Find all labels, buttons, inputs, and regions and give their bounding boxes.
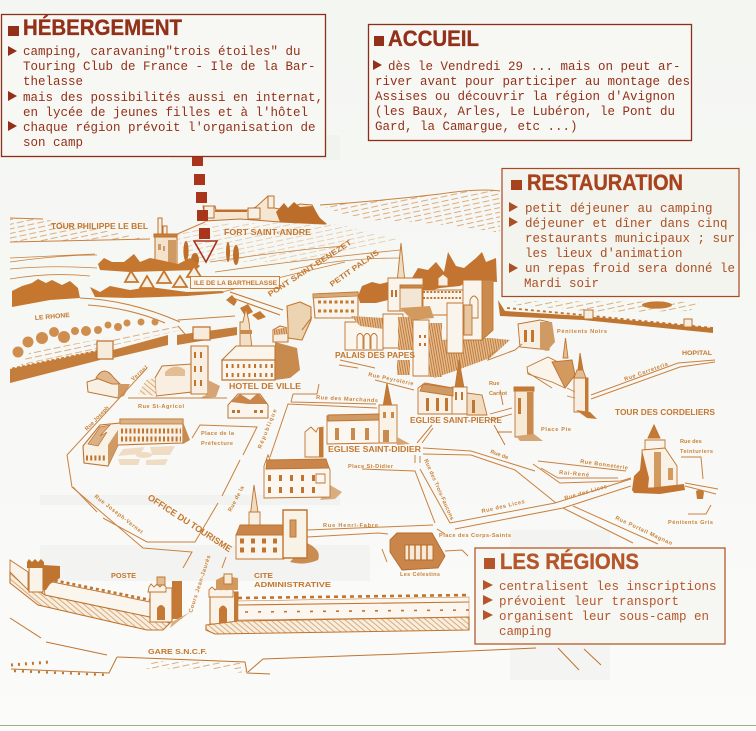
street labels: Rue (489, 381, 500, 387)
street labels: Pénitents Noirs (557, 329, 607, 335)
bullet text: restauration: Mardi soir (524, 277, 599, 291)
bullet text: les régions: camping (499, 625, 552, 639)
street labels: Place de la (201, 431, 235, 437)
bullet text: hébergement (8, 45, 323, 150)
street labels: Rue Bonneterie (580, 459, 628, 472)
street labels: Rue de (489, 449, 509, 461)
place labels: PETIT PALAIS (328, 248, 381, 289)
street labels: Place des Corps-Saints (439, 533, 511, 539)
Hôtel de Ville (222, 308, 300, 380)
street labels: Rue Portail Magnan (614, 515, 673, 547)
bullet text: les régions: prévoient leur transport (499, 595, 679, 609)
campsite tents (125, 266, 201, 288)
panel: hébergement (2, 14, 326, 156)
street labels: Rue des Trois-Faucons (422, 458, 454, 521)
place labels: EGLISE SAINT-PIERRE (410, 416, 503, 425)
church, Place Saint-Didier (264, 455, 342, 500)
street labels: Carnot (489, 391, 507, 397)
bullet text: hébergement: thelasse (23, 75, 83, 89)
street labels: Préfecture (201, 441, 233, 447)
place labels: LE RHONE (35, 312, 71, 322)
bullet text: restauration (509, 202, 735, 291)
Pénitents Noirs chapel (518, 320, 555, 351)
street labels: Rue Henri-Fabre (323, 523, 378, 529)
bullet text: hébergement: son camp (23, 136, 83, 150)
bullet text: restauration: petit déjeuner au camping (525, 202, 713, 216)
Eglise Saint-Pierre (418, 360, 487, 415)
bullet text: hébergement: camping, caravaning"trois étoiles" du (23, 45, 301, 59)
tower, rue Carnot (490, 387, 543, 445)
heading: les régions: LES RÉGIONS (500, 549, 639, 574)
bullet text: les régions: organisent leur sous-camp en (499, 610, 709, 624)
heading: accueil: ACCUEIL (388, 26, 479, 51)
panel: accueil (368, 24, 692, 140)
bullet text: hébergement: en lycée de jeunes filles et à l'hôtel (23, 106, 308, 120)
street labels: Les Célestins (400, 572, 440, 578)
bullet text: restauration: restaurants municipaux ; sur (525, 232, 735, 246)
Eglise Saint-Didier (305, 383, 410, 457)
street network (67, 344, 718, 568)
bullet text: les régions (483, 580, 717, 639)
Préfecture garden (118, 446, 175, 465)
street labels: République (257, 409, 279, 450)
place labels: PONT SAINT-BENEZET (266, 238, 354, 299)
gate tower right (209, 574, 238, 624)
cypress trees (183, 241, 239, 267)
tour Philippe le Bel (154, 218, 177, 265)
island vegetation (12, 254, 224, 307)
domed building (87, 371, 130, 398)
house with tower, Place Pie (527, 338, 597, 419)
Rhône ramparts (10, 327, 237, 383)
bullet text: restauration: un repas froid sera donné le (525, 262, 735, 276)
street labels: Rue Joseph-Vernet (93, 494, 144, 536)
railway station (10, 618, 601, 675)
street labels: Place St-Didier (348, 464, 394, 470)
fort Saint-André (203, 196, 327, 224)
place labels (35, 222, 716, 656)
panel: les régions (475, 548, 725, 644)
street labels: Rue Joseph (84, 405, 111, 432)
show-through ghost print (40, 135, 610, 680)
dashed pointer to campsite (192, 156, 210, 239)
pont Saint-Bénézet and Petit Palais (226, 292, 358, 342)
Préfecture (83, 419, 190, 466)
bullet text: accueil: Assises ou découvrir la région d'Avignon (375, 90, 675, 104)
street labels: Rue des (680, 439, 702, 445)
street labels: Rue des Lices (564, 484, 608, 502)
street labels: Vernet (130, 365, 149, 382)
street labels: Rai-René (559, 470, 589, 479)
bullet text: hébergement: mais des possibilités aussi en internat, (23, 91, 323, 105)
place labels: ILE DE LA BARTHELASSE (194, 280, 277, 287)
Saint-Agricol church block (138, 346, 220, 398)
street labels: Rue des Marchands (316, 395, 378, 404)
panel: restauration (502, 168, 739, 296)
southern ramparts, left section (10, 559, 170, 630)
eastern rampart (498, 300, 713, 333)
Les Célestins (390, 533, 445, 570)
place labels: TOUR DES CORDELIERS (615, 408, 716, 417)
river Rhône banks and trees (12, 298, 235, 366)
street labels: Cours Jean-Jaurès (188, 555, 212, 614)
bullet text: restauration: déjeuner et dîner dans cinq (525, 217, 728, 231)
hills and horizon (10, 190, 500, 292)
street labels: Place Pie (541, 427, 571, 433)
place labels: EGLISE SAINT-DIDIER (328, 445, 421, 454)
place labels: FORT SAINT-ANDRE (224, 228, 312, 237)
bullet text: accueil: dès le Vendredi 29 ... mais on peut ar- (388, 60, 681, 74)
bullet text: accueil: (les Baux, Arles, Le Lubéron, le Pont du (375, 105, 675, 119)
church, Cité administrative (236, 485, 319, 564)
street labels: Teinturiers (680, 449, 713, 455)
heading: restauration: RESTAURATION (527, 170, 683, 195)
bullet text: restauration: les lieux d'animation (525, 247, 683, 261)
place labels: ADMINISTRATIVE (254, 580, 331, 589)
heading: hébergement: HÉBERGEMENT (23, 15, 183, 40)
street labels (84, 329, 713, 614)
bullet text: accueil (373, 60, 690, 134)
bullet text: accueil: Gard, la Camargue, etc ...) (375, 120, 578, 134)
map of Avignon (10, 190, 718, 675)
bullet text: hébergement: Touring Club de France - Ile de la Bar- (23, 60, 316, 74)
place labels: POSTE (111, 571, 136, 580)
street labels: Rue Peyrolerie (368, 372, 414, 388)
place labels: PALAIS DES PAPES (335, 351, 416, 360)
arrowhead marker: campsite location (194, 241, 217, 262)
Tour des Cordeliers church (632, 425, 704, 499)
gate tower left (148, 577, 190, 628)
southern ramparts, right section (206, 595, 469, 634)
street labels: Rue des Lices (481, 499, 525, 515)
bullet text: accueil: river avant pour participer au montage des (375, 75, 690, 89)
place labels: CITE (254, 571, 273, 580)
place labels: OFFICE DU TOURISME (146, 492, 234, 554)
place labels: GARE S.N.C.F. (148, 647, 207, 656)
place labels: HOPITAL (682, 350, 712, 357)
Palais des Papes (345, 243, 510, 378)
street labels: Rue de la (227, 485, 246, 513)
street labels: Rue St-Agricol (138, 404, 184, 410)
street labels: Rue Carreteria (624, 361, 670, 383)
bullet text: hébergement: chaque région prévoit l'organisation de (23, 121, 316, 135)
bullet text: les régions: centralisent les inscriptions (499, 580, 717, 594)
place labels: TOUR PHILIPPE LE BEL (51, 222, 148, 231)
trees behind the palace (358, 252, 497, 303)
place labels: HOTEL DE VILLE (229, 381, 301, 391)
house (228, 393, 268, 418)
street labels: Pénitents Gris (668, 520, 713, 526)
